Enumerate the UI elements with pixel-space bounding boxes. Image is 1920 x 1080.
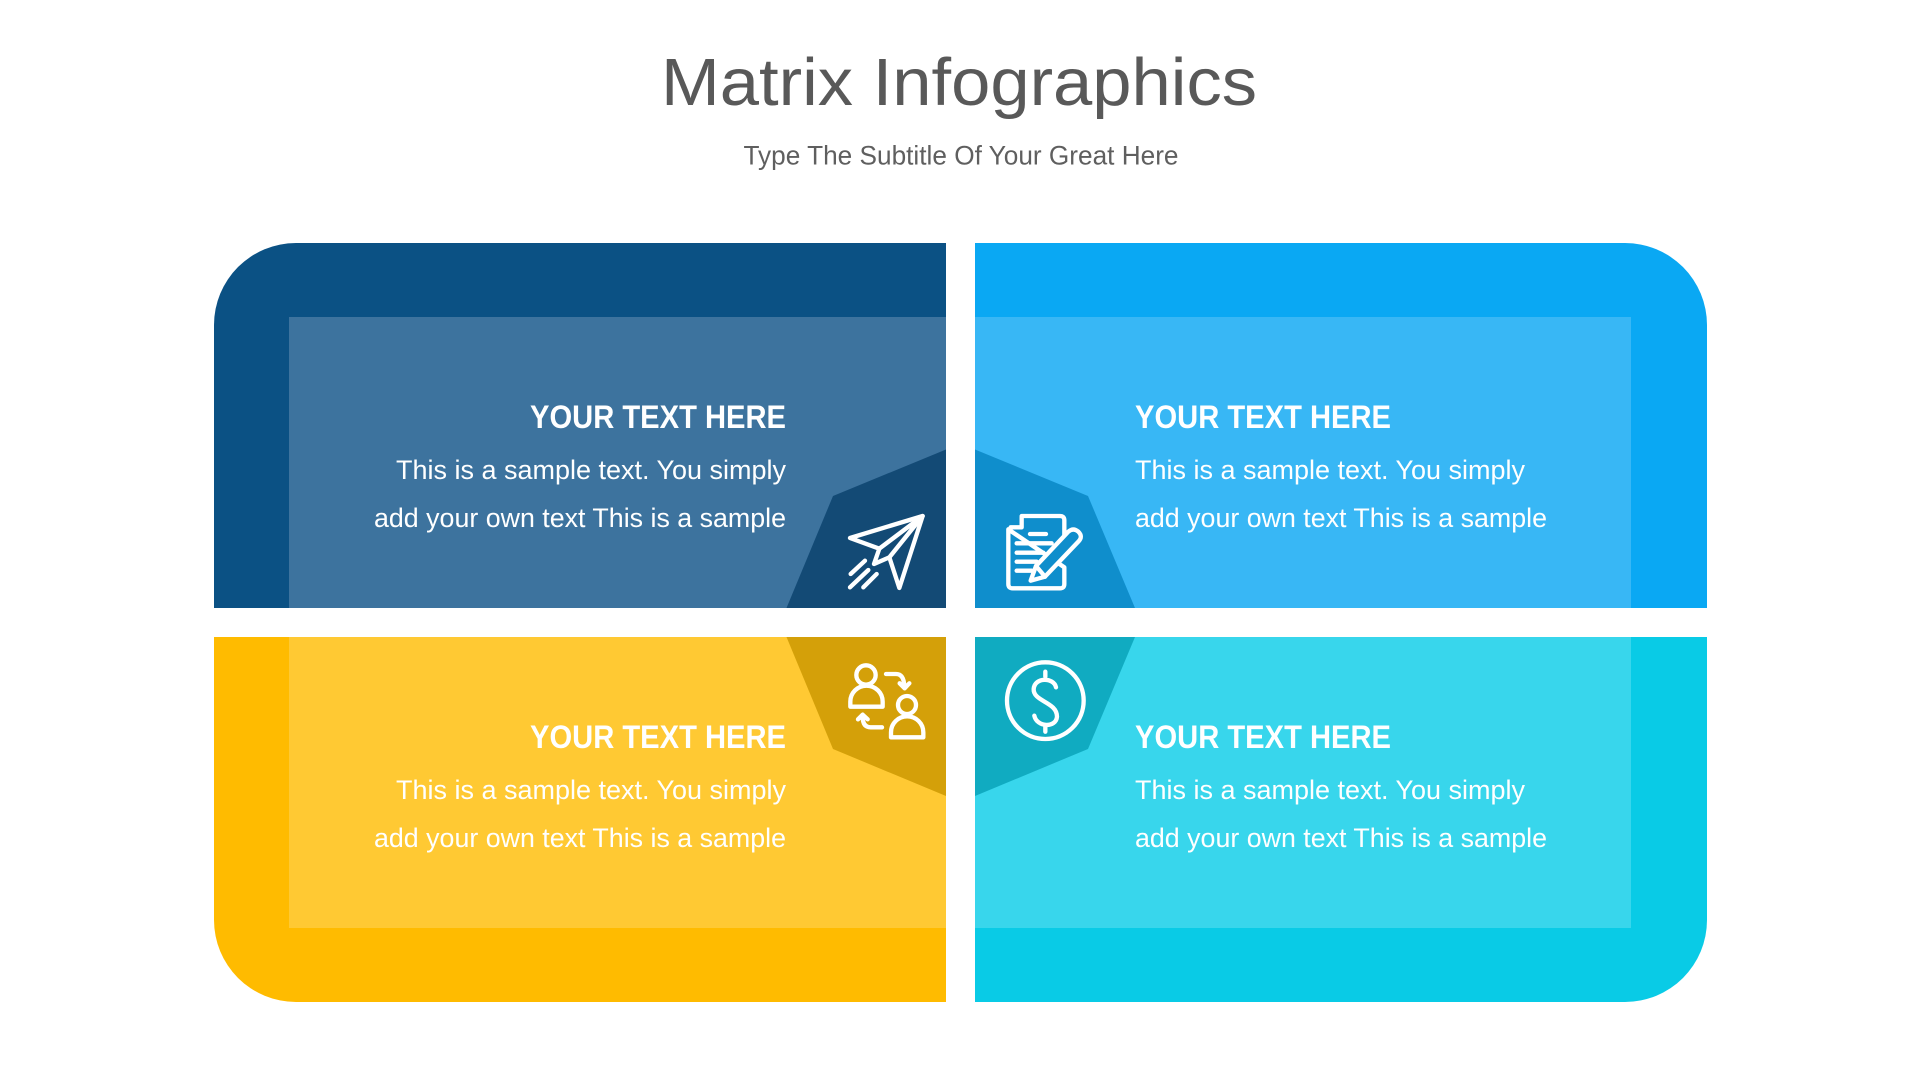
body text: add your own text This is a sample xyxy=(1135,823,1547,853)
panel: bottom left yellow xyxy=(214,637,946,1002)
inner panel: navy xyxy=(289,317,946,608)
body text: This is a sample text. You simply xyxy=(396,775,786,805)
panel: top left navy xyxy=(214,243,946,608)
outer shape: navy xyxy=(214,243,946,608)
inner panel: cyan xyxy=(975,637,1631,928)
subtitle: Type The Subtitle Of Your Great Here xyxy=(744,140,1178,170)
outer shape: yellow xyxy=(214,637,946,1002)
body text: This is a sample text. You simply xyxy=(396,455,786,485)
body text xyxy=(1135,775,1547,853)
corner tab: blue xyxy=(975,450,1135,608)
body text: add your own text This is a sample xyxy=(374,823,786,853)
panel: bottom right cyan xyxy=(975,637,1707,1002)
heading: YOUR TEXT HERE xyxy=(530,719,786,755)
outer shape: blue xyxy=(975,243,1707,608)
corner tab: navy xyxy=(786,450,946,608)
body text: add your own text This is a sample xyxy=(374,503,786,533)
inner panel: blue xyxy=(975,317,1631,608)
heading: YOUR TEXT HERE xyxy=(1135,399,1391,435)
body text: This is a sample text. You simply xyxy=(1135,455,1525,485)
body text xyxy=(374,775,786,853)
icon: document and pencil xyxy=(1008,516,1081,588)
icon: dollar coin xyxy=(1007,662,1084,739)
inner panel: yellow xyxy=(289,637,946,928)
corner tab: yellow xyxy=(786,637,946,796)
title: Matrix Infographics xyxy=(661,45,1257,120)
body text xyxy=(374,455,786,533)
heading: YOUR TEXT HERE xyxy=(1135,719,1391,755)
body text: add your own text This is a sample xyxy=(1135,503,1547,533)
icon: people exchange xyxy=(850,665,923,737)
corner tab: cyan xyxy=(975,637,1135,796)
body text: This is a sample text. You simply xyxy=(1135,775,1525,805)
body text xyxy=(1135,455,1547,533)
icon: paper plane xyxy=(850,516,923,588)
outer shape: cyan xyxy=(975,637,1707,1002)
panel: top right blue xyxy=(975,243,1707,608)
heading: YOUR TEXT HERE xyxy=(530,399,786,435)
